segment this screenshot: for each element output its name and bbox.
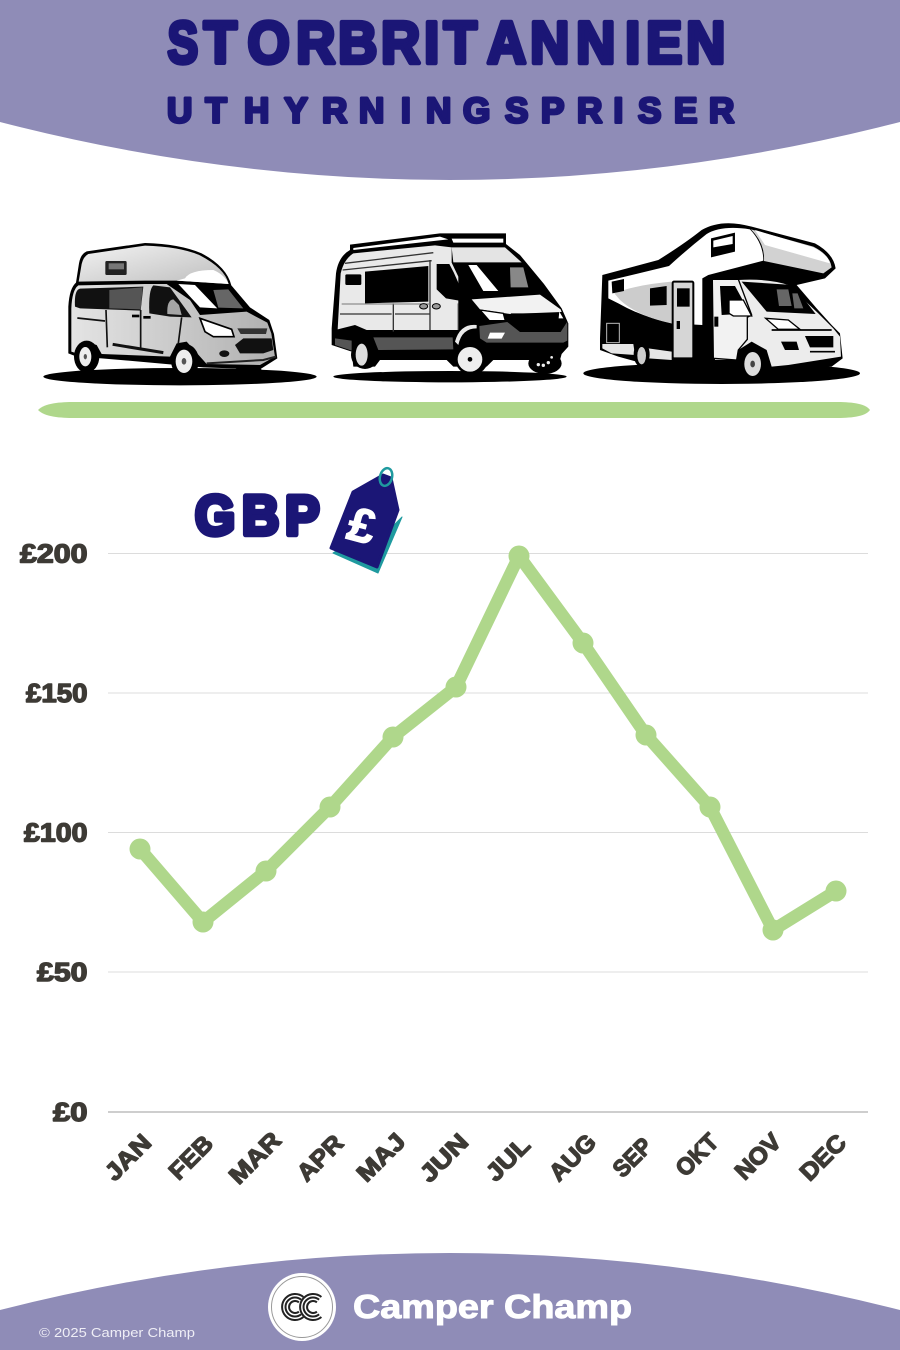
front details [200,318,234,337]
wheels [74,341,99,373]
lower skirt [602,344,672,360]
cab [715,280,841,367]
grille [511,313,557,331]
windows [365,266,428,303]
x axis labels: AUG [544,1129,602,1187]
data line [130,546,846,940]
subtitle: UTHYRNINGSPRISER [167,92,734,130]
roof rack [353,237,503,250]
silhouette [600,223,843,377]
side swoosh [614,282,672,323]
x axis labels: MAJ [352,1128,411,1188]
front details [766,318,800,329]
currency label GBP: GBP [195,484,320,547]
x axis labels: OKT [670,1128,724,1182]
wheels [634,342,650,367]
bumper [479,322,567,343]
icon: high-top camper van [43,243,317,385]
x axis labels: JAN [100,1129,157,1186]
door lines [77,310,182,350]
cab-over nose [751,229,832,273]
icon: alcove motorhome [583,223,860,384]
x axis labels: SEP [608,1133,658,1183]
y axis labels: £0 [53,1097,88,1127]
windows [612,279,624,293]
x axis labels: APR [292,1130,349,1187]
white body [608,228,763,325]
x axis labels [100,1127,852,1190]
x axis labels: MAR [224,1127,287,1190]
icon: pound price tag [331,467,402,573]
logo badge [268,1273,336,1341]
silhouette [332,233,568,367]
divider bar [38,402,870,418]
side windows [75,287,143,311]
x axis labels: DEC [795,1129,852,1186]
body lines [340,253,458,332]
hood [472,295,562,314]
y axis labels: £150 [26,678,88,708]
header banner [0,0,900,180]
y axis labels: £200 [20,538,88,568]
copyright: © 2025 Camper Champ [39,1325,195,1340]
title: S [168,10,198,76]
x axis labels: FEB [164,1130,219,1185]
wheels [351,341,379,369]
y axis labels: £100 [24,818,88,848]
icon: panel camper van [332,233,568,382]
windscreen [178,284,250,311]
x axis labels: JUN [415,1129,474,1188]
lights [480,310,505,321]
icon: pound price tag: £ [342,497,382,556]
brand name: Camper Champ [353,1288,632,1325]
y axis labels [20,538,88,1127]
footer banner [0,1253,900,1350]
grid lines [108,554,868,972]
line chart [20,538,868,1190]
side panel [338,245,458,330]
y axis labels: £50 [37,957,88,987]
x axis labels: JUL [481,1132,536,1187]
title: TORBRITANNIEN [204,11,725,76]
lower trim [373,337,453,350]
door [673,282,693,358]
roof pod [79,246,229,284]
x axis labels: NOV [730,1128,787,1185]
